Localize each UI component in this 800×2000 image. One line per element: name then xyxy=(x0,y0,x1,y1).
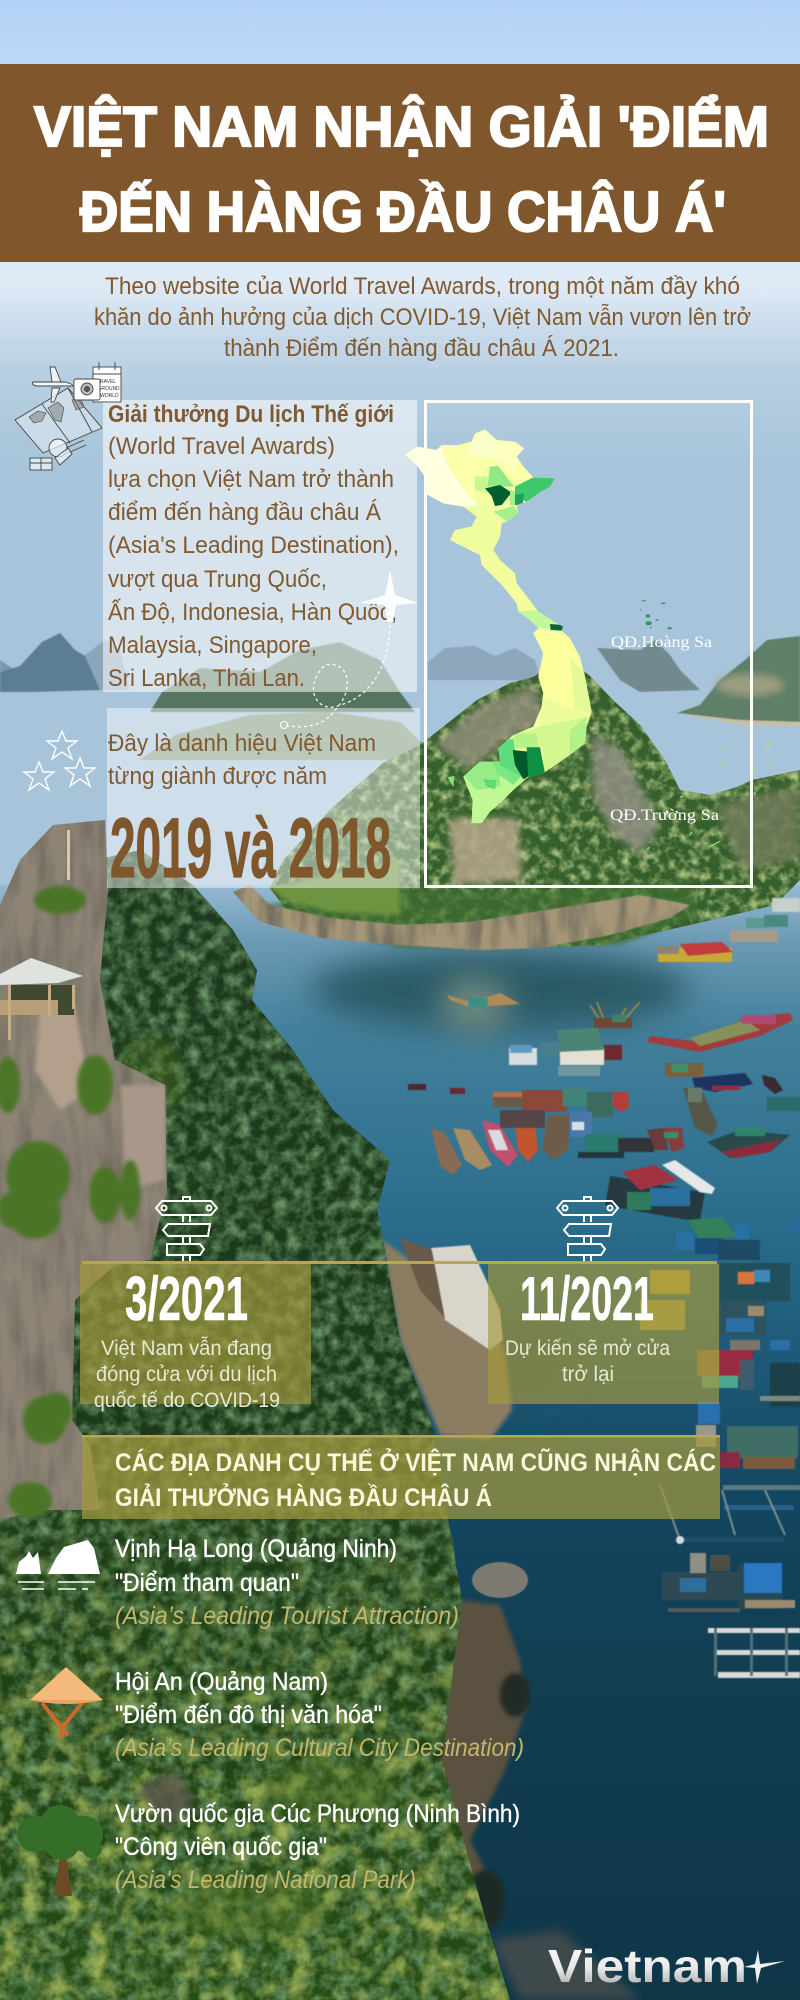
title banner xyxy=(0,64,800,262)
icon: signpost right xyxy=(557,1197,618,1262)
award item: Cuc Phuong: "Công viên quốc gia" xyxy=(115,1833,327,1861)
award item: Cuc Phuong: (Asia's Leading National Park) xyxy=(115,1866,416,1894)
intro text: khăn do ảnh hưởng của dịch COVID-19, Việt Nam vẫn vươn lên trở xyxy=(94,304,751,331)
award text: Giải thưởng Du lịch Thế giới xyxy=(108,401,394,428)
panel: previous years xyxy=(107,708,420,895)
rocky shoreline xyxy=(233,860,690,950)
label: Truong Sa: QĐ.Trường Sa xyxy=(610,807,719,824)
heading text: GIẢI THƯỞNG HÀNG ĐẦU CHÂU Á xyxy=(115,1482,492,1512)
award text: (Asia's Leading Destination), xyxy=(108,532,399,559)
icon: travel map and camera: WORLD xyxy=(100,393,119,399)
label: Hoang Sa: QĐ.Hoàng Sa xyxy=(611,634,712,651)
heading text: CÁC ĐỊA DANH CỤ THỂ Ở VIỆT NAM CŨNG NHẬN CÁC xyxy=(115,1447,716,1477)
award text: (World Travel Awards) xyxy=(108,433,335,460)
panel: March 2021 xyxy=(80,1264,311,1412)
boats and floating village xyxy=(400,898,800,1678)
award item: Hoi An: (Asia’s Leading Cultural City Destination) xyxy=(115,1734,524,1762)
icon: three stars xyxy=(24,731,95,790)
award item: Cuc Phuong xyxy=(115,1800,520,1894)
map frame xyxy=(426,402,752,886)
award item: Cuc Phuong: Vườn quốc gia Cúc Phương (Ninh Bình) xyxy=(115,1800,520,1828)
map of Vietnam by province xyxy=(400,390,771,850)
icon: travel map and camera: TRAVEL xyxy=(97,379,116,385)
award item: Ha Long: Vịnh Hạ Long (Quảng Ninh) xyxy=(115,1535,397,1563)
previous years text: từng giành được năm xyxy=(108,763,327,790)
intro text: Theo website của World Travel Awards, trong một năm đầy khó xyxy=(105,273,740,300)
award text: điểm đến hàng đầu châu Á xyxy=(108,499,381,526)
previous years text: Đây là danh hiệu Việt Nam xyxy=(108,730,376,757)
award text: Ấn Độ, Indonesia, Hàn Quốc, xyxy=(108,598,397,626)
panel: award description xyxy=(103,400,417,692)
Phu Quoc island xyxy=(448,776,454,787)
previous years text xyxy=(108,730,376,790)
icon: travel map and camera: AROUND xyxy=(98,386,120,392)
panel: section heading xyxy=(82,1435,720,1519)
icon: tree xyxy=(17,1805,103,1896)
description xyxy=(505,1337,670,1386)
award item: Hoi An xyxy=(115,1668,524,1762)
limestone cliff xyxy=(0,820,167,1520)
central karst hill xyxy=(260,657,800,950)
icon: conical hat xyxy=(30,1667,103,1738)
description: Việt Nam vẫn đang xyxy=(101,1337,272,1360)
beach xyxy=(382,1240,640,2000)
heading text xyxy=(115,1447,716,1512)
award text: Sri Lanka, Thái Lan. xyxy=(108,665,305,692)
logo: Vietnam+: Vietnam xyxy=(548,1940,747,1992)
icon: signpost left xyxy=(156,1197,217,1262)
title text line 1: VIỆT NAM NHẬN GIẢI 'ĐIỂM xyxy=(34,94,769,159)
icon: travel map and camera xyxy=(15,362,121,470)
Truong Sa islands xyxy=(647,741,771,850)
date: 11/2021 xyxy=(520,1265,654,1334)
description: quốc tế do COVID-19 xyxy=(94,1389,280,1412)
award text xyxy=(108,401,399,692)
big years: 2019 và 2018 xyxy=(110,801,391,895)
date: 3/2021 xyxy=(125,1265,248,1334)
right side of village xyxy=(720,1263,790,1301)
award item: Ha Long: "Điểm tham quan" xyxy=(115,1569,299,1597)
intro text xyxy=(94,273,751,362)
pavilion xyxy=(0,958,83,1040)
award text: lựa chọn Việt Nam trở thành xyxy=(108,466,394,493)
timeline divider line xyxy=(82,1261,717,1264)
intro text: thành Điểm đến hàng đầu châu Á 2021. xyxy=(224,335,619,362)
panel: November 2021 xyxy=(488,1264,719,1404)
title text line 2: ĐẾN HÀNG ĐẦU CHÂU Á' xyxy=(80,179,726,244)
award text: Malaysia, Singapore, xyxy=(108,632,317,659)
forest xyxy=(0,850,510,2000)
description: Dự kiến sẽ mở cửa xyxy=(505,1337,670,1360)
Hoang Sa islands xyxy=(640,600,672,629)
description xyxy=(94,1337,280,1412)
icon: airplane with dashed route xyxy=(280,570,418,728)
award item: Ha Long xyxy=(115,1535,459,1630)
description: trở lại xyxy=(562,1363,614,1386)
award item: Ha Long: (Asia’s Leading Tourist Attraction) xyxy=(115,1602,459,1630)
award item: Hoi An: "Điểm đến đô thị văn hóa" xyxy=(115,1701,382,1729)
description: đóng cửa với du lịch xyxy=(96,1363,277,1386)
award text: vượt qua Trung Quốc, xyxy=(108,566,327,593)
award item: Hoi An: Hội An (Quảng Nam) xyxy=(115,1668,328,1696)
icon: Ha Long islands xyxy=(16,1540,100,1589)
